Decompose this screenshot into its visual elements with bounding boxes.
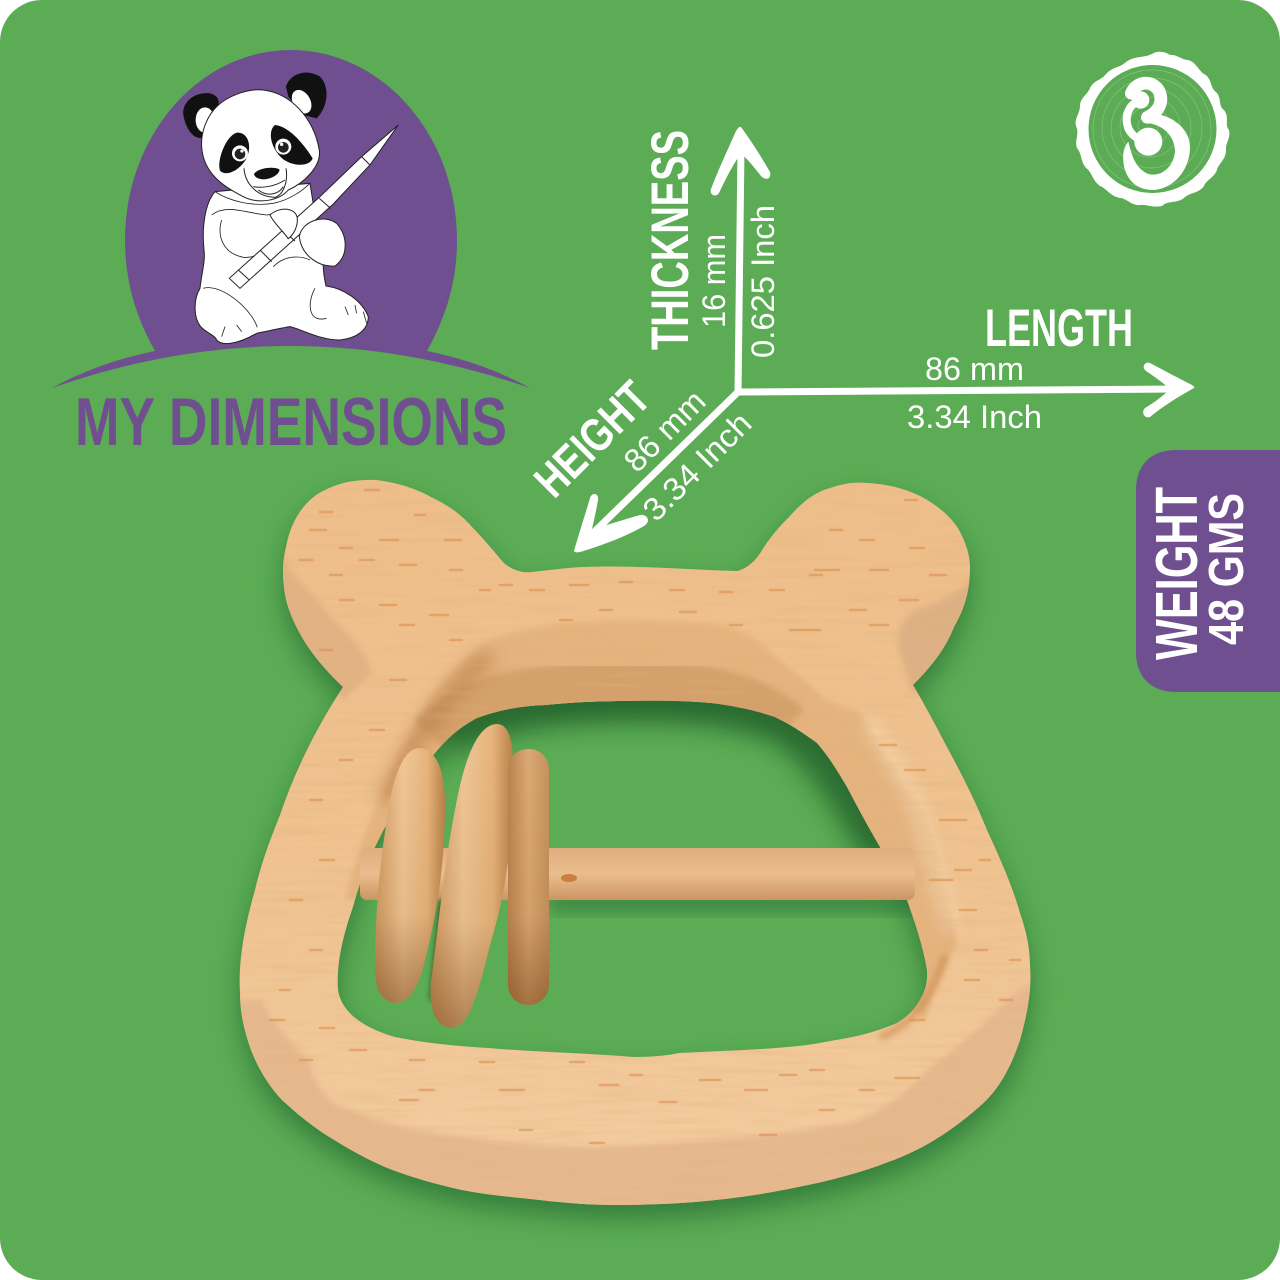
panda right paw (299, 219, 345, 266)
panda ears (183, 73, 327, 138)
bottom right corner crease (880, 955, 945, 1037)
grain flecks (270, 490, 1020, 1143)
bamboo stick (229, 125, 398, 288)
value: 3.34 inch: 3.34 Inch (907, 399, 1042, 435)
dimension diagram (524, 127, 1194, 552)
monogram lower dot (1134, 128, 1162, 156)
monogram top hook (1131, 83, 1161, 117)
heading: MY DIMENSIONS (75, 384, 507, 460)
shadow inside the opening (450, 698, 920, 912)
arrow: height (574, 391, 739, 552)
cast shadow (240, 494, 1030, 1219)
rod knot (561, 874, 577, 882)
swirl monogram (1123, 83, 1190, 190)
brand logo (1076, 52, 1229, 207)
value: 0.625 inch: 0.625 Inch (745, 205, 781, 358)
disc shadow on rod (430, 900, 462, 1000)
bevel dark spots (385, 655, 490, 800)
right bevel highlight (868, 720, 952, 930)
value: 16 mm: 16 mm (696, 234, 732, 328)
weight label: WEIGHT (1144, 487, 1210, 660)
monogram upper dot (1132, 91, 1149, 109)
purple circle with swoosh (52, 50, 530, 388)
monogram inner strand (1127, 101, 1143, 141)
value: 86 mm diagonal: 86 mm (616, 383, 713, 479)
panda illustration (183, 73, 398, 344)
wooden rod (360, 848, 915, 900)
panda eye patches (219, 133, 249, 173)
rattle frame (225, 470, 1045, 1220)
weight tab (1136, 450, 1280, 692)
middle disc (431, 724, 513, 1028)
left ear side face (283, 562, 370, 698)
panda left hand (270, 209, 297, 239)
left disc (375, 748, 445, 1003)
right ear side face (898, 581, 970, 692)
value: 3.34 inch diagonal: 3.34 Inch (635, 405, 759, 528)
monogram bowl (1123, 113, 1190, 190)
label: thickness: THICKNESS (641, 130, 700, 350)
panda body (195, 183, 368, 344)
tree rings (1093, 70, 1211, 188)
panda head (202, 90, 320, 201)
wooden rattle photo (225, 470, 1045, 1220)
panda muzzle and mouth (254, 168, 279, 179)
wood grain texture (300, 542, 965, 1134)
tab background (1136, 450, 1280, 692)
arrow: thickness (711, 127, 770, 394)
label: length: LENGTH (985, 299, 1133, 358)
badge: my dimensions logo (52, 50, 530, 460)
wobbly white seal (1076, 52, 1229, 207)
inner bevel (345, 621, 957, 1020)
label: height: HEIGHT (524, 370, 660, 507)
bottom side face (240, 982, 1030, 1205)
weight value: 48 GMS (1200, 493, 1254, 645)
arrow: length (736, 363, 1194, 417)
green disc (1088, 65, 1216, 193)
bevel dark band (430, 682, 790, 735)
panda body lines (203, 183, 367, 337)
value: 86 mm: 86 mm (925, 351, 1024, 387)
right disc (508, 749, 549, 1005)
